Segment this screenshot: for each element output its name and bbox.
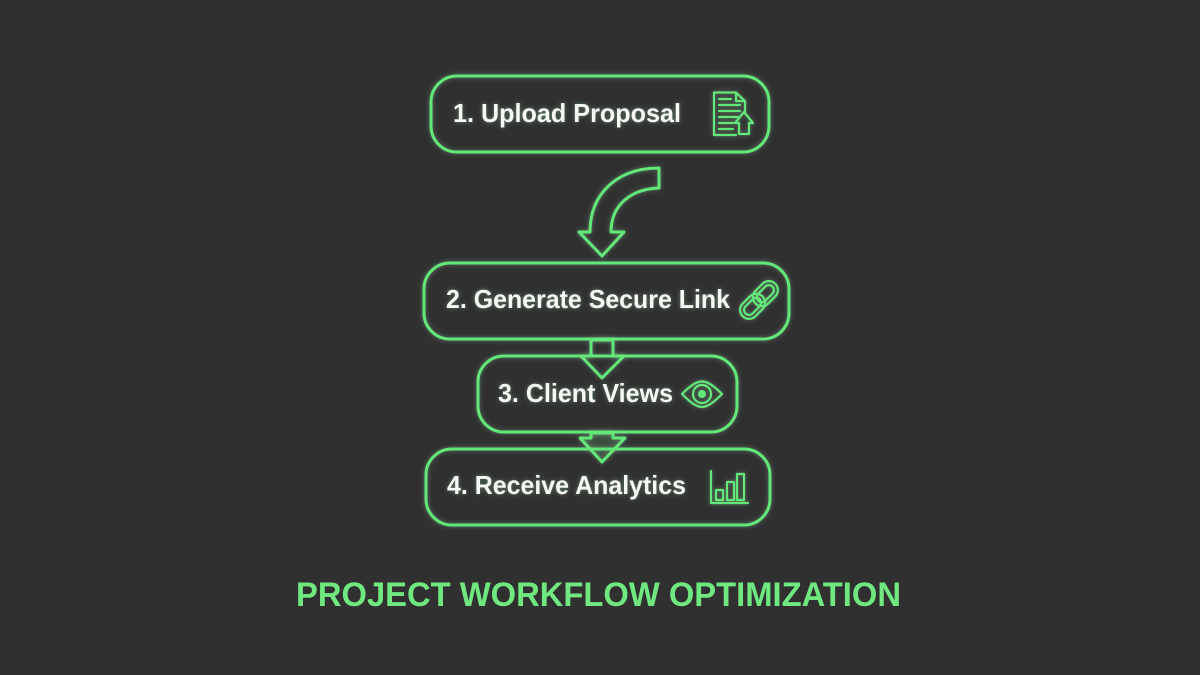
icon: document with upload arrow <box>714 92 753 135</box>
icon: chain link <box>736 277 782 323</box>
step 2 label: 2. Generate Secure Link <box>446 284 731 314</box>
title: PROJECT WORKFLOW OPTIMIZATION <box>296 576 901 614</box>
step 2: generate secure link <box>424 263 789 339</box>
step 3: client views <box>478 356 737 432</box>
step 1 label: 1. Upload Proposal <box>453 98 681 128</box>
step 4: receive analytics <box>426 449 770 525</box>
step 3 label: 3. Client Views <box>498 378 673 408</box>
arrow: curved from step 1 to step 2 <box>579 168 659 256</box>
arrow: step 3 to step 4 <box>580 433 625 462</box>
step 4 box <box>426 449 770 525</box>
step 1 box <box>431 76 769 152</box>
icon: bar chart <box>711 471 748 503</box>
step 4 label: 4. Receive Analytics <box>447 470 686 500</box>
icon: eye <box>682 382 722 407</box>
step 1: upload proposal <box>431 76 769 152</box>
step 3 box <box>478 356 737 432</box>
arrow: step 2 to step 3 <box>581 340 624 378</box>
step 2 box <box>424 263 789 339</box>
